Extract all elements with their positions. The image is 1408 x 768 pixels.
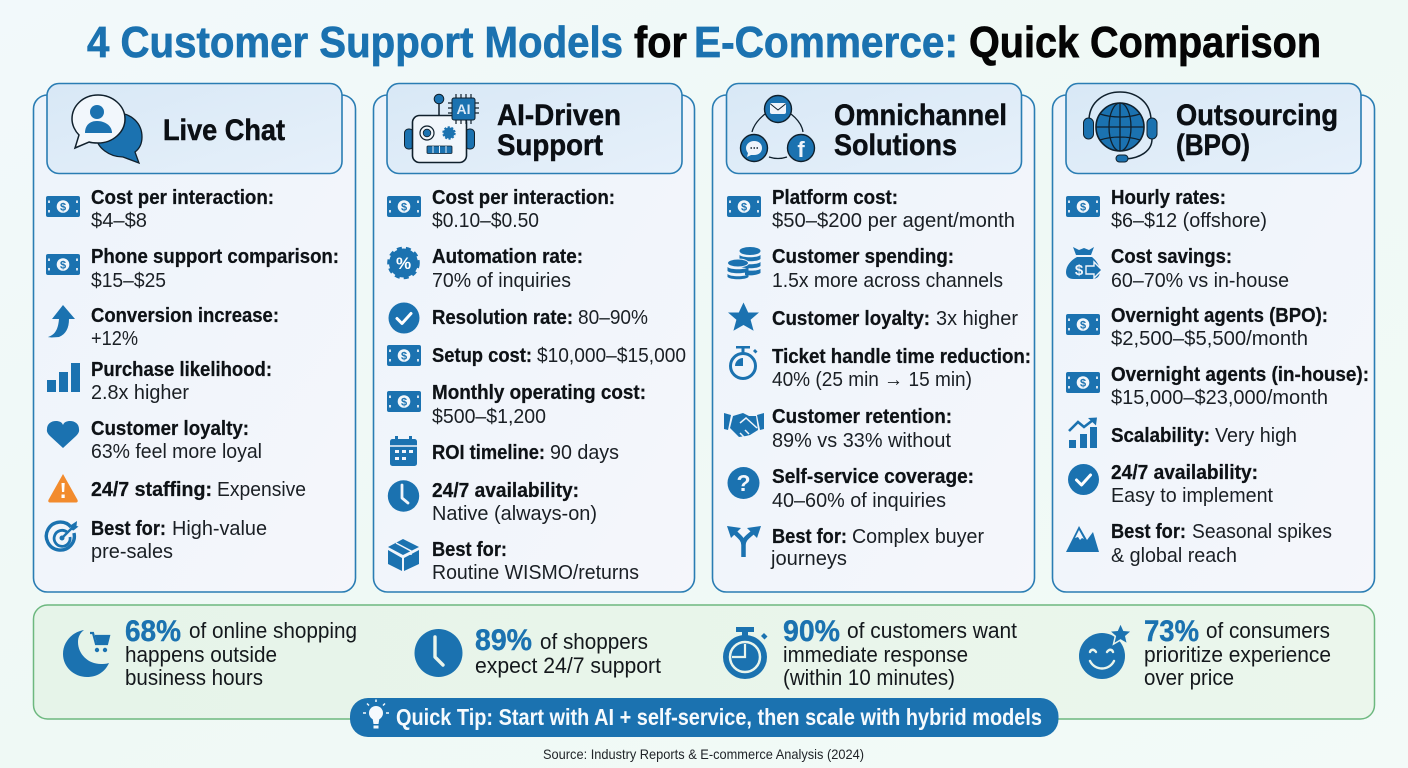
icon: stopwatch [730, 346, 758, 378]
text: cost per interaction: Cost per interaction: [432, 186, 615, 209]
text: 24/7 staffing: 24/7 staffing: [91, 478, 212, 501]
text: customer spending: Customer spending: [772, 245, 954, 268]
stat: 68% [63, 615, 357, 690]
text: ticket handle time reduction: 40% (25 min → 15 min) [772, 368, 972, 391]
text: 89%: of shoppers [540, 629, 648, 654]
row: overnight agents in-house [1066, 363, 1369, 409]
stat: 73% [1079, 615, 1331, 690]
text: ROI timeline: 90 days [550, 441, 619, 464]
icon: light bulb [363, 700, 389, 728]
heading: Outsourcing (BPO): Outsourcing [1176, 99, 1338, 132]
heading: Outsourcing (BPO): (BPO) [1176, 129, 1250, 162]
text: 90%: immediate response [783, 642, 968, 667]
title: 4 Customer Support Models [87, 18, 623, 67]
icon: money bill [1066, 314, 1100, 335]
heading: Omnichannel Solutions: Solutions [834, 129, 957, 162]
text: cost savings: Cost savings: [1111, 245, 1232, 268]
text: setup cost: $10,000–$15,000 [537, 344, 686, 367]
text: setup cost: Setup cost: [432, 344, 532, 367]
icon: robot with AI chip: AI [456, 101, 470, 117]
row: overnight agents BPO [1066, 304, 1328, 350]
icon: money bill [1066, 372, 1100, 393]
text: customer loyalty: 3x higher [936, 307, 1018, 330]
text: 73%: of consumers [1206, 618, 1330, 643]
text: purchase likelihood: Purchase likelihood: [91, 358, 272, 381]
row: best for [727, 525, 984, 570]
text: overnight agents BPO: Overnight agents (BPO): [1111, 304, 1328, 327]
text: 73%: over price [1144, 665, 1234, 690]
panel: Outsourcing (BPO) [1052, 84, 1374, 592]
header: Outsourcing (BPO) [1066, 84, 1361, 174]
text: 73%: prioritize experience [1144, 642, 1331, 667]
text: 73%: 73% [1144, 615, 1199, 648]
heading: Omnichannel Solutions: Omnichannel [834, 99, 1007, 132]
text: 24/7 availability: 24/7 availability: [432, 479, 579, 502]
icon: money bill [727, 196, 761, 217]
icon: connected channels: f [797, 137, 805, 162]
text: scalability: Scalability: [1111, 424, 1210, 447]
text: 90%: 90% [783, 615, 840, 648]
text: quick tip: Quick Tip: Start with AI + self-service, then scale with hybrid models [396, 704, 1042, 730]
text: best for: Seasonal spikes [1192, 520, 1332, 543]
text: hourly rates: Hourly rates: [1111, 186, 1226, 209]
text: best for: Best for: [1111, 520, 1186, 543]
title: E-Commerce: [694, 18, 958, 67]
heading: Live Chat: Live Chat [163, 114, 285, 147]
icon: money bag [1066, 247, 1102, 279]
icon: heart [47, 421, 79, 448]
header: Live Chat [47, 84, 342, 174]
row: phone support comparison [46, 245, 339, 292]
text: resolution rate: 80–90% [578, 306, 648, 329]
text: hourly rates: $6–$12 (offshore) [1111, 209, 1267, 232]
icon: growth chart [1069, 418, 1097, 448]
text: 24/7 availability: Easy to implement [1111, 484, 1273, 507]
icon: question mark circle [728, 467, 760, 499]
callout: quick tip [350, 698, 1058, 737]
text: ticket handle time reduction: Ticket handle time reduction: [772, 345, 1031, 368]
icon: connected channels [740, 96, 814, 162]
text: purchase likelihood: 2.8x higher [91, 381, 189, 404]
heading: AI-Driven Support: AI-Driven [497, 99, 621, 132]
row: customer retention [724, 405, 952, 452]
icon: money bag: $ [1075, 262, 1084, 279]
text: best for: High-value [172, 517, 267, 540]
text: resolution rate: Resolution rate: [432, 306, 573, 329]
text: overnight agents in-house: $15,000–$23,000/month [1111, 386, 1328, 409]
text: 68%: 68% [125, 615, 181, 648]
panel: Omnichannel Solutions [712, 84, 1034, 592]
source note: Source: Industry Reports & E-commerce Analysis (2024) [543, 746, 864, 762]
text: phone support comparison: $15–$25 [91, 269, 166, 292]
row: best for [388, 538, 639, 584]
heading: AI-Driven Support: Support [497, 129, 603, 162]
text: customer retention: Customer retention: [772, 405, 952, 428]
text: best for: Routine WISMO/returns [432, 561, 639, 584]
text: 90%: (within 10 minutes) [783, 665, 955, 690]
row: cost savings [1066, 245, 1289, 292]
text: platform cost: Platform cost: [772, 186, 898, 209]
text: customer loyalty: Customer loyalty: [772, 307, 930, 330]
text: 24/7 availability: 24/7 availability: [1111, 461, 1258, 484]
text: cost per interaction: $4–$8 [91, 209, 147, 232]
row: resolution rate [388, 302, 648, 334]
row: hourly rates [1066, 186, 1267, 232]
row: 24/7 staffing [49, 475, 306, 502]
text: 90%: of customers want [847, 618, 1018, 643]
row: 24/7 availability [388, 479, 597, 525]
text: customer loyalty: Customer loyalty: [91, 417, 249, 440]
row: 24/7 availability [1068, 461, 1273, 507]
icon: target [46, 521, 78, 550]
text: best for: pre-sales [91, 540, 173, 563]
icon: percent badge [389, 248, 418, 278]
row: self-service coverage [728, 465, 974, 512]
text: cost savings: 60–70% vs in-house [1111, 269, 1289, 292]
icon: question mark circle: ? [736, 470, 751, 496]
icon: check circle [388, 302, 420, 334]
row: setup cost [387, 344, 686, 367]
panel: key statistics [34, 605, 1374, 719]
icon: split arrows [727, 526, 761, 557]
icon: smiley with star [1079, 623, 1132, 679]
text: ROI timeline: ROI timeline: [432, 441, 545, 464]
icon: up arrow [48, 305, 75, 337]
icon: coin stacks [728, 247, 760, 279]
text: 68%: happens outside [125, 642, 277, 667]
header: AI-Driven Support [387, 84, 682, 174]
text: 89%: expect 24/7 support [475, 653, 662, 678]
header: Omnichannel Solutions [726, 84, 1022, 174]
row: best for [46, 517, 267, 563]
text: 24/7 availability: Native (always-on) [432, 502, 597, 525]
text: conversion increase: +12% [91, 327, 138, 350]
text: cost per interaction: Cost per interaction: [91, 186, 274, 209]
icon: clock [388, 480, 419, 512]
text: best for: Best for: [772, 525, 847, 548]
text: 89%: 89% [475, 624, 532, 657]
icon: money bill [387, 345, 421, 366]
text: automation rate: Automation rate: [432, 245, 583, 268]
row: purchase likelihood [47, 358, 272, 404]
icon: mountains [1066, 526, 1099, 552]
title [87, 18, 1321, 67]
row: ROI timeline [390, 436, 619, 466]
icon: money bill [1066, 196, 1100, 217]
text: self-service coverage: Self-service coverage: [772, 465, 974, 488]
icon: star [728, 302, 759, 331]
text: conversion increase: Conversion increase: [91, 304, 279, 327]
row: customer loyalty [728, 302, 1018, 331]
icon: handshake [724, 413, 764, 437]
icon: robot with AI chip [404, 94, 479, 162]
icon: chat bubbles [72, 95, 142, 163]
text: self-service coverage: 40–60% of inquiries [772, 489, 946, 512]
icon: money bill [387, 196, 421, 217]
title: for [634, 18, 687, 67]
text: cost per interaction: $0.10–$0.50 [432, 209, 539, 232]
row: automation rate [389, 245, 583, 292]
text: monthly operating cost: $500–$1,200 [432, 405, 546, 428]
text: monthly operating cost: Monthly operating cost: [432, 381, 646, 404]
icon: package box [388, 539, 419, 571]
text: scalability: Very high [1215, 424, 1297, 447]
text: customer retention: 89% vs 33% without [772, 429, 951, 452]
icon: warning triangle [49, 475, 77, 502]
text: 24/7 staffing: Expensive [217, 478, 306, 501]
text: overnight agents BPO: $2,500–$5,500/month [1111, 327, 1308, 350]
icon: money bill [46, 196, 80, 217]
icon: bar chart [47, 363, 80, 392]
row: scalability [1069, 418, 1297, 448]
icon: moon with cart [63, 630, 109, 677]
text: best for: Best for: [91, 517, 166, 540]
row: best for [1066, 520, 1332, 567]
row: cost per interaction [387, 186, 615, 232]
text: phone support comparison: Phone support comparison: [91, 245, 339, 268]
row: ticket handle time reduction [730, 345, 1031, 391]
stat: 89% [414, 624, 662, 678]
text: automation rate: 70% of inquiries [432, 269, 571, 292]
row: cost per interaction [46, 186, 274, 232]
icon: money bill [387, 391, 421, 412]
icon: money bill [46, 254, 80, 275]
row: platform cost [727, 186, 1015, 232]
title: Quick Comparison [969, 18, 1321, 67]
icon: clock [414, 629, 462, 677]
text: best for: journeys [770, 547, 847, 570]
text: platform cost: $50–$200 per agent/month [772, 209, 1015, 232]
icon: globe headset [1084, 92, 1157, 162]
row: customer loyalty [47, 417, 262, 463]
row: customer spending [728, 245, 1003, 292]
icon: percent badge: % [396, 254, 411, 273]
icon: check circle [1068, 464, 1099, 495]
text: overnight agents in-house: Overnight agents (in-house): [1111, 363, 1369, 386]
text: customer loyalty: 63% feel more loyal [91, 440, 262, 463]
row: monthly operating cost [387, 381, 646, 428]
panel: Live Chat [34, 84, 356, 592]
panel: AI-Driven Support [374, 84, 694, 592]
text: customer spending: 1.5x more across channels [772, 269, 1003, 292]
text: best for: & global reach [1111, 544, 1237, 567]
text: best for: Best for: [432, 538, 507, 561]
icon: calendar [390, 436, 417, 466]
row: conversion increase [48, 304, 279, 350]
text: 68%: business hours [125, 665, 263, 690]
icon: stopwatch [723, 627, 768, 679]
text: best for: Complex buyer [852, 525, 984, 548]
text: 68%: of online shopping [189, 618, 357, 643]
stat: 90% [723, 615, 1018, 690]
